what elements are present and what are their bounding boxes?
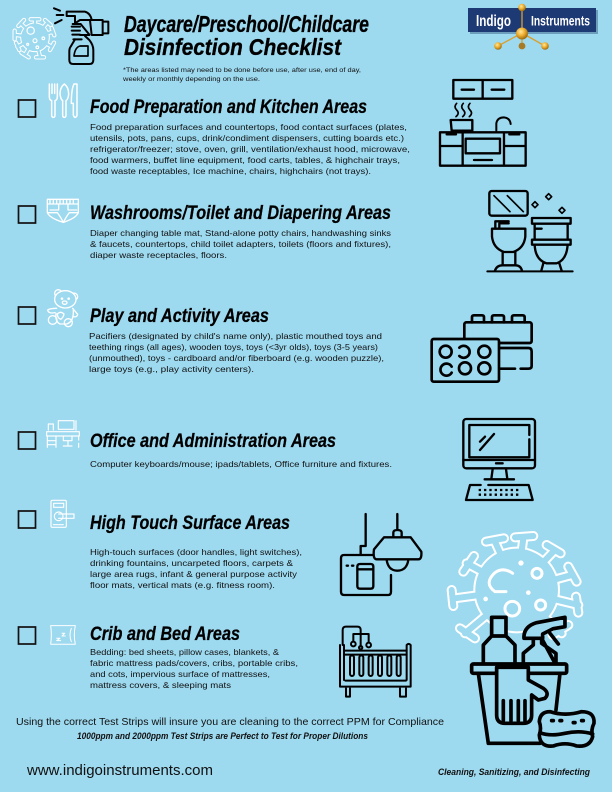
checkbox: play: [18, 307, 36, 324]
text: play: (unmouthed), toys - cardboard and/or fiberboard (e.g. wooden puzzle),: [89, 353, 384, 363]
note text: *The areas listed may need to be done before use, after use, end of day,: [123, 67, 361, 74]
text: crib: fabric mattress pads/covers, cribs, portable cribs,: [90, 658, 298, 668]
spray bottle: [523, 617, 565, 665]
icon: diaper: [47, 199, 78, 222]
heading: office: Office and Administration Areas: [90, 431, 336, 452]
bucket rim and body: [478, 673, 560, 743]
icon: computer: [463, 419, 535, 500]
logo wordmark: Instruments: [531, 14, 590, 28]
heading: high touch: High Touch Surface Areas: [90, 513, 290, 534]
heading: crib: Crib and Bed Areas: [90, 624, 240, 645]
text: food: utensils, pots, pans, cups, drink/condiment dispensers, cutting boards etc.): [90, 133, 404, 143]
sponge: [539, 712, 594, 746]
text: play: [89, 331, 384, 374]
footer text: test strips: [16, 716, 444, 741]
icon: pillow: [51, 626, 75, 644]
heading: play: Play and Activity Areas: [90, 306, 269, 327]
text: play: Pacifiers (designated by child's name only), plastic mouthed toys and: [89, 331, 382, 341]
checkbox: washrooms: [18, 206, 36, 223]
icon: lamp and switch: [341, 514, 421, 595]
text: crib: mattress covers, & sleeping mats: [90, 680, 231, 690]
logo wordmark: Indigo: [476, 13, 511, 30]
text: washrooms: diaper waste receptacles, floors.: [90, 250, 227, 260]
icon: door handle: [51, 500, 74, 527]
icon: kitchen: [440, 80, 526, 166]
text: crib: and cots, impervious surface of mattresses,: [90, 669, 270, 679]
checkbox: high touch: [18, 511, 36, 528]
text: high touch: large area rugs, infant & general purpose activity: [90, 569, 298, 579]
checkbox: crib: [18, 627, 36, 644]
icon: sink and toilet: [487, 191, 573, 271]
text: food: [90, 122, 410, 176]
icon: white virus small: [15, 19, 54, 57]
text: play: teething rings (all ages), wooden toys, toys (<3yr olds), toys (3-5 years): [89, 342, 378, 352]
text: high touch: High-touch surfaces (door handles, light switches),: [90, 547, 302, 557]
tagline: Cleaning, Sanitizing, and Disinfecting: [438, 767, 590, 778]
icon: teddy bear: [48, 290, 78, 327]
logo wordmark: [476, 13, 590, 30]
text: high touch: drinking fountains, uncarpeted floors, carpets &: [90, 558, 293, 568]
checkbox: food: [18, 100, 36, 117]
text: food: food waste receptables, Ice machine, chairs, highchairs (not trays).: [90, 166, 371, 176]
checkbox: office: [18, 432, 36, 449]
text: play: large toys (e.g., play activity centers).: [89, 364, 254, 374]
note text: [122, 67, 361, 83]
text: food: Food preparation surfaces and countertops, food contact surfaces (plates,: [90, 122, 407, 132]
icon: spray bottle in hand: [54, 8, 108, 64]
title: Daycare/Preschool/Childcare: [124, 11, 369, 37]
glove: [497, 667, 547, 723]
text: office: Computer keyboards/mouse; ipads/tablets, Office furniture and fixtures.: [90, 459, 392, 469]
text: washrooms: Diaper changing table mat, Stand-alone potty chairs, handwashing sinks: [90, 228, 391, 238]
icon: cutlery: [49, 84, 77, 117]
heading: washrooms: Washrooms/Toilet and Diapering Areas: [90, 203, 391, 224]
bottle: [483, 617, 515, 665]
icon: office desk: [47, 421, 79, 447]
text: high touch: floor mats, vertical mats (e.g. fitness room).: [90, 580, 275, 590]
footer text: test strips: Using the correct Test Strips will insure you are cleaning to the correct PPM for Compliance: [16, 716, 444, 728]
heading: food: Food Preparation and Kitchen Areas: [90, 97, 367, 118]
note text: weekly or monthly depending on the use.: [122, 76, 260, 83]
text: high touch: [90, 547, 302, 590]
text: washrooms: & faucets, countertops, child toilet adapters, toilets (floors and fixtures),: [90, 239, 391, 249]
website: www.indigoinstruments.com: [26, 763, 213, 779]
text: food: food warmers, buffet line equipment, food carts, tables, & highchair trays,: [90, 155, 400, 165]
text: crib: Bedding: bed sheets, pillow cases, blankets, &: [90, 647, 279, 657]
title: [124, 11, 369, 60]
icon: large white virus: [452, 536, 578, 638]
text: crib: [90, 647, 298, 690]
text: food: refrigerator/freezer; stove, oven, grill, ventilation/exhaust hood, microwave,: [90, 144, 410, 154]
icon: crib: [340, 627, 411, 697]
icon: bucket with bottles, glove and sponge: [472, 617, 594, 746]
text: washrooms: [90, 228, 391, 260]
icon: building blocks: [432, 315, 532, 382]
footer text: test strips: 1000ppm and 2000ppm Test Strips are Perfect to Test for Proper Dilutions: [77, 731, 368, 741]
title: Disinfection Checklist: [124, 34, 342, 60]
logo: Indigo Instruments: [468, 4, 598, 50]
